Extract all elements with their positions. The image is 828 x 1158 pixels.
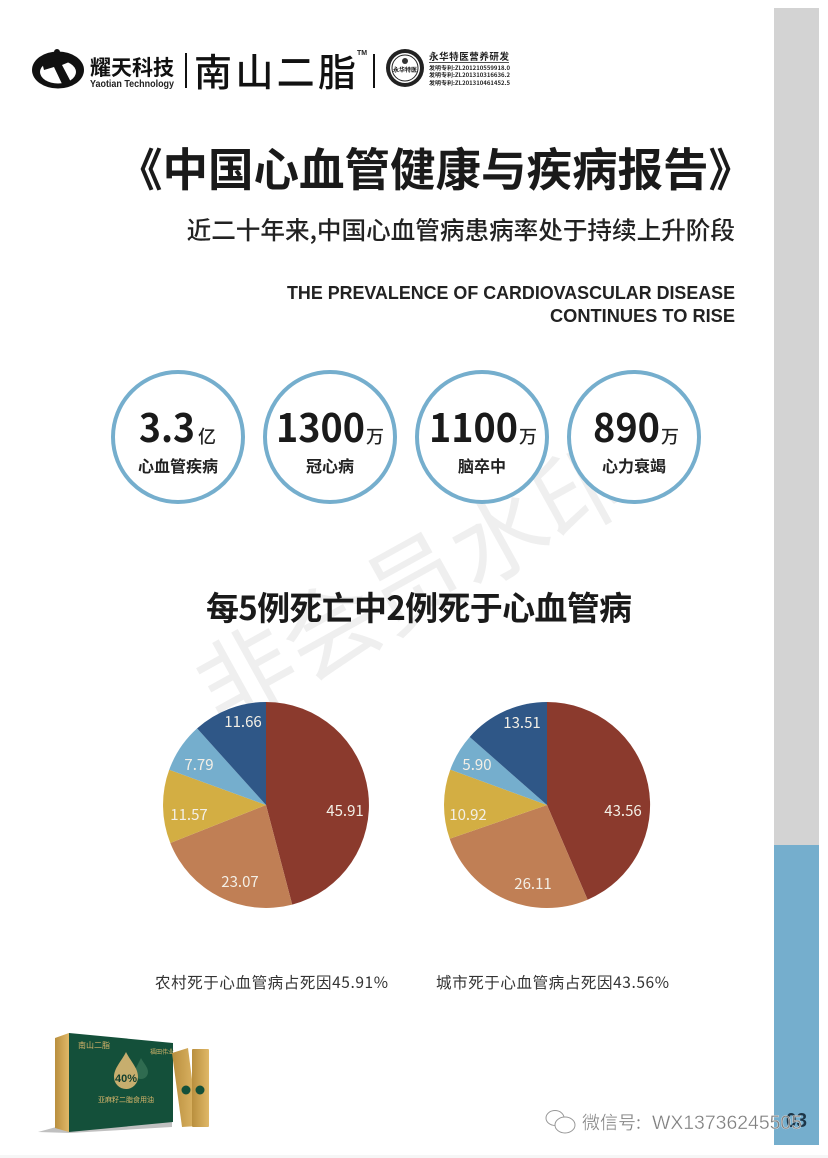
stat circle: 1100万 <box>417 372 547 502</box>
pie chart: urban: 13.51 <box>503 712 541 733</box>
subtitle: 近二十年来,中国心血管病患病率处于持续上升阶段 <box>187 211 735 247</box>
stat circle: 3.3亿: 心血管疾病 <box>138 453 218 477</box>
certification text: 发明专利:ZL201310461452.5 <box>429 79 510 87</box>
stat circle: 890万: 心力衰竭 <box>602 453 666 477</box>
stat circle: 1300万: 1300 <box>276 398 365 454</box>
WeChat watermark: 微信号: <box>582 1109 641 1135</box>
pie chart: urban <box>444 702 650 908</box>
product image: box and sachets: 亚麻籽二脂食用油 <box>98 1095 154 1105</box>
pie chart: urban: 26.11 <box>514 873 552 894</box>
icon: Yaotian logo <box>32 49 84 88</box>
page number: 03 <box>786 1110 807 1132</box>
pie caption: urban: 城市死于心血管病占死因43.56% <box>436 971 669 993</box>
stat circle: 890万: 万 <box>661 423 679 449</box>
section heading: 每5例死亡中2例死于心血管病 <box>206 582 632 630</box>
pie chart: urban: 43.56 <box>604 800 642 821</box>
main title: 《中国心血管健康与疾病报告》 <box>117 134 754 200</box>
Yaotian brand name: 耀天科技 <box>90 52 174 82</box>
Yaotian English name: Yaotian Technology <box>90 79 174 90</box>
certification text: 永华特医营养研发 <box>429 49 509 63</box>
WeChat watermark: WX13736245505 <box>652 1113 802 1134</box>
English subtitle: THE PREVALENCE OF CARDIOVASCULAR DISEASE <box>287 283 735 303</box>
pie caption: rural: 农村死于心血管病占死因45.91% <box>155 971 388 993</box>
icon: WeChat <box>546 1110 575 1133</box>
WeChat watermark <box>582 1109 802 1135</box>
stat circle: 1300万: 冠心病 <box>306 453 354 477</box>
pie chart: rural <box>163 702 369 908</box>
English subtitle <box>287 283 735 326</box>
side band: blue <box>774 845 819 1145</box>
stat circle: 890万: 890 <box>593 398 660 454</box>
stat circle: 1100万: 万 <box>519 423 537 449</box>
stat circle: 1100万: 1100 <box>429 398 518 454</box>
stat circle: 3.3亿: 3.3 <box>139 398 195 454</box>
pie chart: rural: 11.57 <box>170 804 208 825</box>
pie chart: rural: 45.91 <box>326 800 364 821</box>
certification text <box>429 49 510 87</box>
pie chart: rural: 7.79 <box>184 754 214 775</box>
icon: round certification seal <box>386 49 424 87</box>
pie chart: urban: 5.90 <box>462 754 492 775</box>
stat circle: 890万 <box>569 372 699 502</box>
certification text: 发明专利:ZL201210559918.0 <box>429 64 510 72</box>
stat circle: 1300万: 万 <box>366 423 384 449</box>
product image: box and sachets: 福田伟业 <box>150 1047 174 1056</box>
pie chart: urban: 10.92 <box>449 804 487 825</box>
product image: box and sachets: 南山二脂 <box>78 1040 110 1051</box>
pie chart: rural: 11.66 <box>224 711 262 732</box>
trademark: TM <box>357 50 367 57</box>
English subtitle: CONTINUES TO RISE <box>550 306 735 326</box>
stat circle: 3.3亿 <box>113 372 243 502</box>
product image: box and sachets <box>38 1033 209 1133</box>
background watermark: 非会员水印 <box>168 400 655 754</box>
brand logo header <box>32 42 510 97</box>
pie chart: rural: 23.07 <box>221 871 259 892</box>
icon: round certification seal: 永华特医 <box>393 65 417 74</box>
Nanshan brand name: 南山二脂 <box>194 42 356 97</box>
product image: box and sachets: 40% <box>115 1073 137 1085</box>
side band: grey <box>774 8 819 845</box>
stat circle: 1100万: 脑卒中 <box>458 453 506 477</box>
certification text: 发明专利:ZL201310316636.2 <box>429 71 510 79</box>
stat circle: 3.3亿: 亿 <box>198 423 216 449</box>
stat circle: 1300万 <box>265 372 395 502</box>
